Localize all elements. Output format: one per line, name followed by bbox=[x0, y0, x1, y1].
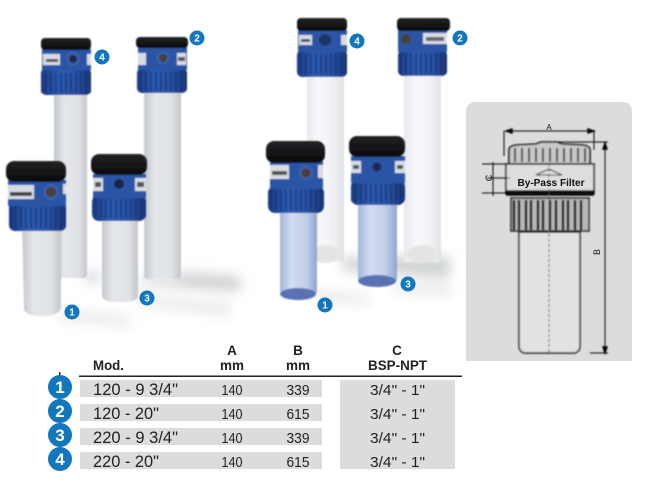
white filter 1 bbox=[6, 161, 66, 316]
photo badge 4 (clear) bbox=[350, 34, 364, 48]
row 1: 339 bbox=[286, 383, 310, 399]
table header bbox=[93, 343, 428, 373]
row 3: 3/4" - 1" bbox=[370, 430, 425, 447]
white filter 2 bbox=[136, 37, 188, 279]
row 4: 140 bbox=[222, 455, 242, 471]
row 4: 220 - 20" bbox=[93, 453, 159, 471]
row 1: 3/4" - 1" bbox=[370, 382, 425, 399]
photo badge 3 (clear) bbox=[400, 276, 416, 292]
row 4 bbox=[80, 452, 425, 471]
row 1 bbox=[80, 380, 425, 399]
row 2: 120 - 20" bbox=[93, 405, 159, 423]
clear blue filter 1 bbox=[266, 141, 325, 300]
row 4: 615 bbox=[286, 455, 310, 471]
clear blue filter 3 bbox=[349, 136, 405, 287]
panel: technical drawing bbox=[466, 102, 632, 361]
photo badge 2 (white): 2 bbox=[194, 34, 200, 44]
row 3: 220 - 9 3/4" bbox=[93, 429, 178, 447]
table header: BSP-NPT bbox=[368, 358, 428, 373]
dimension label B: B bbox=[592, 249, 602, 255]
clear filter 2 bbox=[397, 18, 450, 263]
photo badge 1 (clear) bbox=[318, 298, 332, 312]
table badge 2: 2 bbox=[55, 402, 65, 421]
photo badge 1 (white): 1 bbox=[69, 308, 75, 318]
row 2 bbox=[80, 404, 425, 423]
white filter 4 bbox=[41, 38, 91, 278]
table badges 1-4 bbox=[48, 372, 72, 471]
photo badge 1 (white) bbox=[64, 304, 80, 320]
specification table bbox=[79, 343, 462, 471]
photo badge 4 (white) bbox=[94, 50, 110, 64]
photo badge 2 (clear): 2 bbox=[457, 34, 463, 44]
row 4: 3/4" - 1" bbox=[370, 454, 425, 471]
row 2: 140 bbox=[222, 407, 242, 423]
dimension label A: A bbox=[546, 123, 552, 132]
photo badge 1 (clear): 1 bbox=[322, 300, 328, 312]
photo badge 2 (clear) bbox=[452, 30, 468, 46]
row 3: 140 bbox=[222, 431, 242, 447]
photo badge 4 (clear): 4 bbox=[354, 36, 360, 48]
table header: B bbox=[293, 343, 303, 358]
photo badge 4 (white): 4 bbox=[99, 52, 105, 64]
table header: Mod. bbox=[93, 358, 124, 373]
table header: mm bbox=[286, 358, 310, 373]
shadows under white filters bbox=[60, 272, 240, 326]
photo badge 3 (white) bbox=[140, 290, 154, 306]
table badge 4: 4 bbox=[55, 450, 65, 469]
table header: mm bbox=[220, 358, 244, 373]
row 2: 3/4" - 1" bbox=[370, 406, 425, 423]
row 3: 339 bbox=[286, 431, 310, 447]
table header: C bbox=[392, 343, 402, 358]
photo badge 2 (white) bbox=[190, 30, 204, 46]
table badge 3: 3 bbox=[55, 426, 65, 445]
shadows under clear filters bbox=[315, 256, 450, 304]
filter outline drawing bbox=[482, 129, 608, 353]
row 1: 120 - 9 3/4" bbox=[93, 381, 178, 399]
clear filter 4 bbox=[297, 18, 347, 263]
photo badge 3 (clear): 3 bbox=[405, 280, 411, 290]
column C background bbox=[340, 380, 455, 469]
row 2: 615 bbox=[286, 407, 310, 423]
white filter 3 bbox=[91, 154, 147, 302]
photo badge 3 (white): 3 bbox=[144, 294, 150, 304]
dimension label C: C bbox=[484, 174, 494, 181]
drawing label By-Pass Filter: By-Pass Filter bbox=[518, 177, 584, 189]
row 1: 140 bbox=[222, 383, 242, 399]
table badge 1: 1 bbox=[55, 378, 65, 397]
table header: A bbox=[227, 343, 237, 358]
row 3 bbox=[80, 428, 425, 447]
